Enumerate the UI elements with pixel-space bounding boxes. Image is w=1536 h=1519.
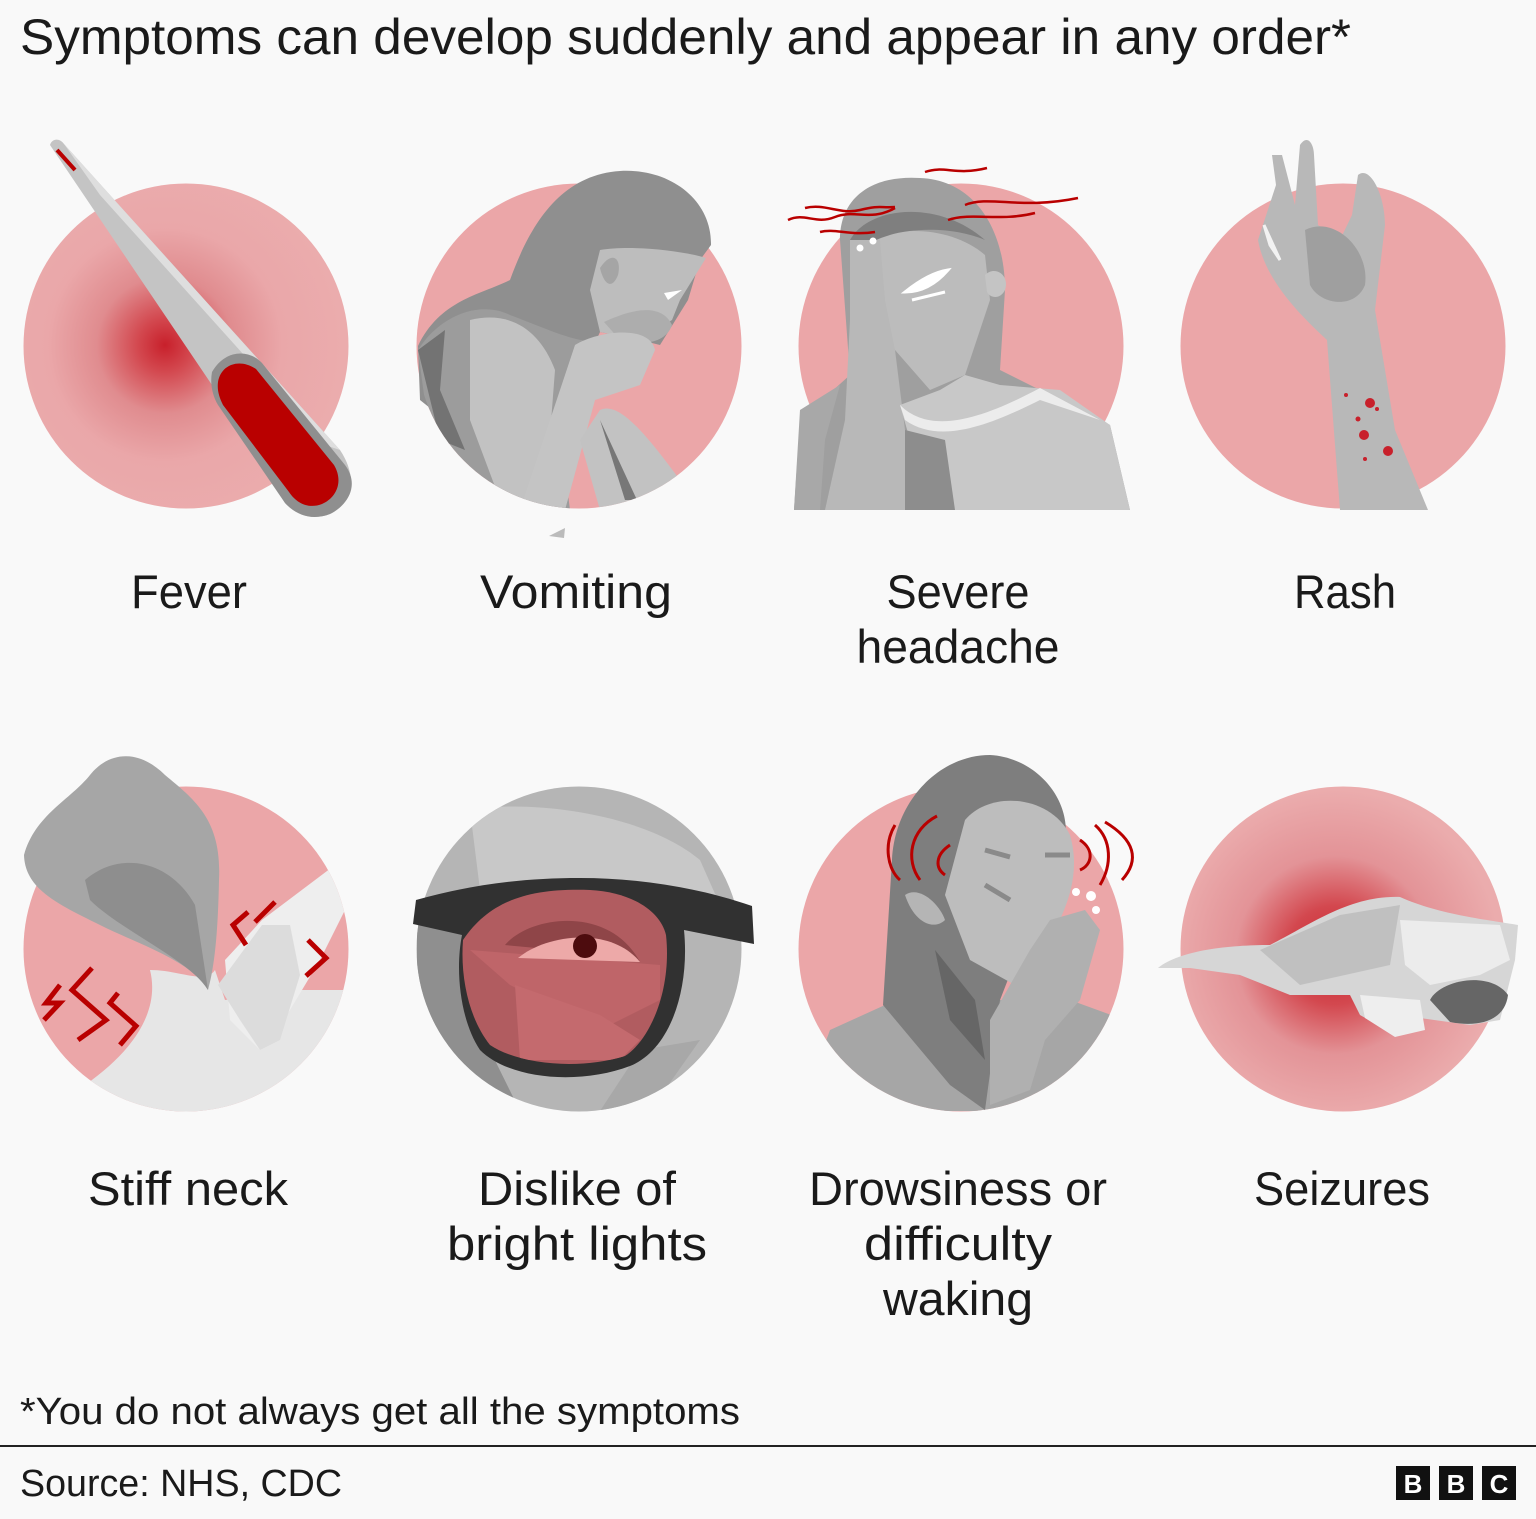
figure: arm and hand xyxy=(1258,140,1428,510)
figure: person holding head xyxy=(794,178,1130,510)
label: drowsiness: Drowsiness or xyxy=(809,1162,1107,1215)
label: dislike of bright lights: Dislike of xyxy=(478,1162,677,1215)
label: drowsiness xyxy=(809,1162,1107,1325)
label: dislike of bright lights: bright lights xyxy=(447,1217,707,1270)
source: Source: NHS, CDC xyxy=(20,1463,342,1505)
logo: BBC: B xyxy=(1447,1469,1465,1499)
divider xyxy=(0,1445,1536,1447)
panel: seizures xyxy=(1158,786,1518,1112)
label: vomiting: Vomiting xyxy=(480,565,672,618)
figure: person lying down xyxy=(1158,897,1518,1037)
footnote: *You do not always get all the symptoms xyxy=(20,1391,740,1433)
label: stiff neck: Stiff neck xyxy=(88,1162,289,1215)
title: Symptoms can develop suddenly and appear in any order* xyxy=(20,9,1351,65)
figure: drowsy person yawning xyxy=(826,755,1110,1111)
panel: stiff neck xyxy=(24,756,360,1120)
panel: rash xyxy=(1180,140,1506,510)
label: fever: Fever xyxy=(131,565,247,618)
icon: rash spots xyxy=(1344,393,1393,461)
icon: dizziness arcs xyxy=(888,816,1132,885)
label: drowsiness: difficulty xyxy=(864,1217,1053,1270)
logo: BBC: B xyxy=(1404,1469,1422,1499)
icon: pain waves xyxy=(788,168,1078,233)
icon: thermometer xyxy=(50,140,352,517)
label: rash: Rash xyxy=(1294,565,1396,618)
panel: severe headache xyxy=(788,168,1130,510)
logo: BBC xyxy=(1396,1466,1516,1500)
label: severe headache: Severe xyxy=(886,565,1030,618)
label: severe headache xyxy=(856,565,1060,673)
icon: sunglasses and eye xyxy=(413,878,754,1077)
figure: neck and shoulder xyxy=(24,756,360,1120)
panel: fever xyxy=(24,140,352,517)
panel: drowsiness xyxy=(798,755,1132,1112)
label: severe headache: headache xyxy=(856,620,1060,673)
small mark xyxy=(549,528,565,538)
figure: person vomiting xyxy=(418,171,711,510)
label: dislike of bright lights xyxy=(447,1162,707,1270)
panel: dislike of bright lights xyxy=(413,786,754,1112)
icon: pain zigzags xyxy=(44,902,326,1045)
panel: vomiting xyxy=(416,171,742,538)
label: drowsiness: waking xyxy=(882,1272,1033,1325)
logo: BBC: C xyxy=(1490,1469,1509,1499)
label: seizures: Seizures xyxy=(1254,1162,1430,1215)
